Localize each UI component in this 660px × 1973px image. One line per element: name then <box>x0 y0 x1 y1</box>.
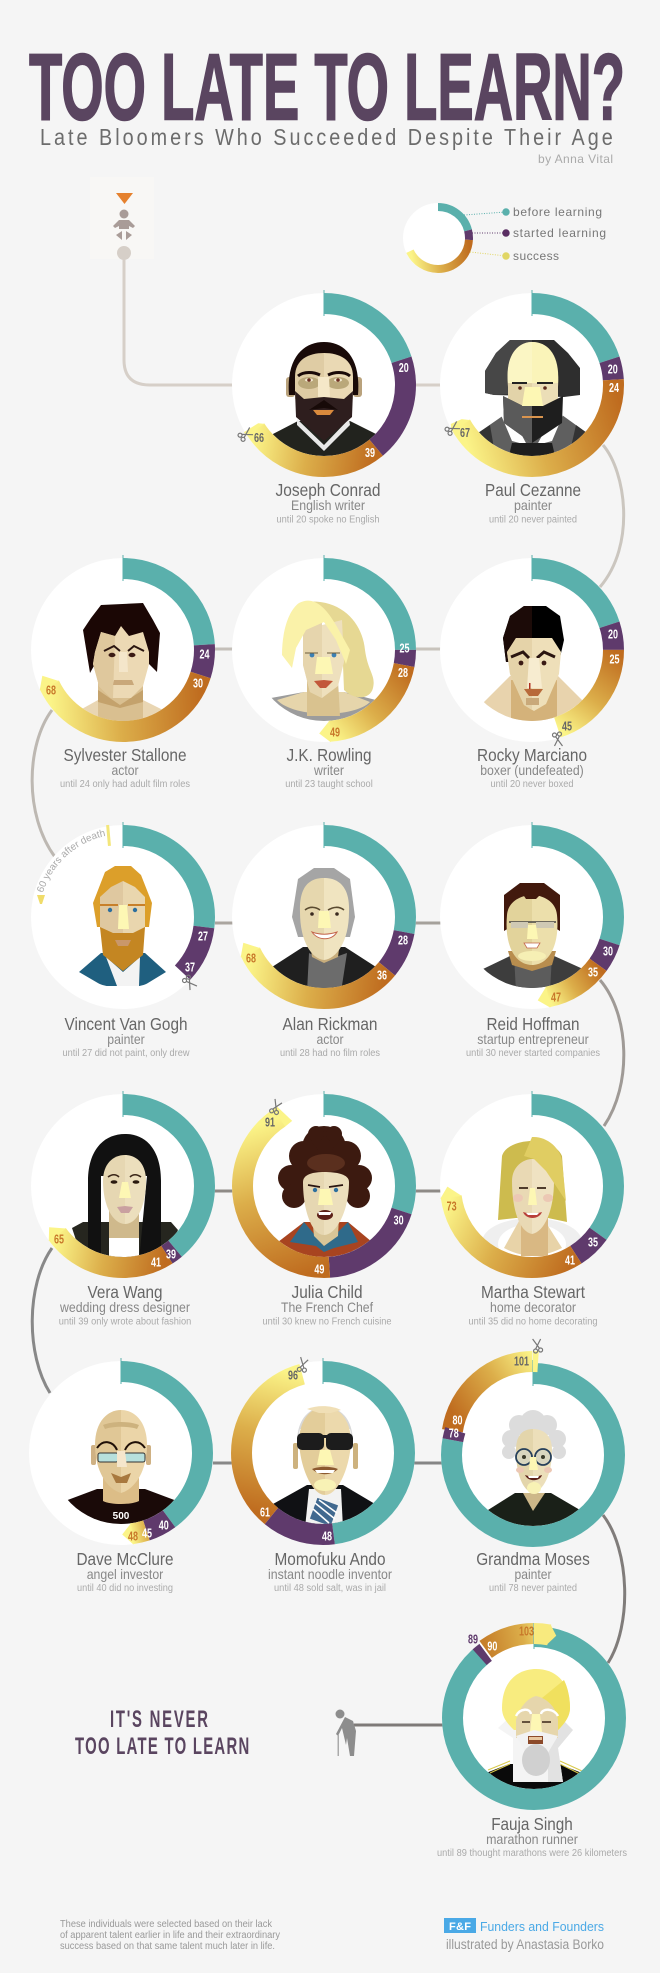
ring values <box>185 930 208 974</box>
ring values: 41 <box>151 1256 161 1270</box>
label: Fauja Singh: until 89 thought marathons were 26 kilometers <box>437 1848 627 1859</box>
ring values: 68 <box>246 952 256 966</box>
label: Vera Wang: wedding dress designer <box>59 1299 190 1315</box>
label: Sylvester Stallone: Sylvester Stallone <box>64 745 186 765</box>
label: Momofuku Ando <box>268 1549 392 1594</box>
portrait: Fauja Singh <box>486 1669 582 1793</box>
label: Julia Child: Julia Child <box>292 1282 362 1302</box>
label: Fauja Singh: marathon runner <box>486 1831 578 1847</box>
ring values: 41 <box>565 1254 575 1268</box>
ring values: 47 <box>551 990 561 1004</box>
label: Vera Wang <box>59 1282 191 1328</box>
label: Joseph Conrad: English writer <box>291 497 365 513</box>
label: Joseph Conrad <box>276 480 380 526</box>
ring values: 35 <box>588 1236 598 1250</box>
label: Reid Hoffman <box>466 1014 600 1059</box>
portrait: J.K. Rowling <box>271 601 376 725</box>
ring chart: Reid Hoffman <box>450 822 614 1010</box>
label: Martha Stewart: home decorator <box>490 1299 576 1315</box>
portrait: Joseph Conrad <box>271 342 376 460</box>
person: Fauja Singh <box>437 1623 627 1859</box>
portrait: Rocky Marciano <box>483 606 585 725</box>
ring chart: J.K. Rowling <box>242 555 406 743</box>
ring chart: Joseph Conrad <box>242 290 406 466</box>
label: Sylvester Stallone: until 24 only had adult film roles <box>60 779 190 790</box>
ring values <box>265 1116 404 1276</box>
closing headline: TOO LATE TO LEARN <box>75 1734 249 1760</box>
ring values <box>254 361 409 460</box>
logo: Funders and Founders: F&F <box>449 1921 471 1933</box>
ring chart: Rocky Marciano <box>450 555 614 732</box>
label: Reid Hoffman: until 30 never started companies <box>466 1048 600 1059</box>
logo: Funders and Founders <box>444 1918 604 1934</box>
ring values: 67 <box>460 426 470 440</box>
ring values: 37 <box>185 960 195 974</box>
label: Vincent Van Gogh: until 27 did not paint, only drew <box>62 1048 190 1059</box>
icon: scissors <box>296 1357 310 1374</box>
legend: started learning <box>513 226 606 240</box>
portrait: Sylvester Stallone <box>83 603 162 721</box>
label: Rocky Marciano: until 20 never boxed <box>490 779 574 790</box>
ring values: 49 <box>314 1262 324 1276</box>
ring values: 25 <box>400 642 410 656</box>
portrait: Momofuku Ando <box>273 1406 375 1528</box>
ring values <box>562 628 620 734</box>
icon: scissors <box>237 427 254 442</box>
footer note: of apparent talent earlier in life and their extraordinary <box>60 1930 280 1941</box>
label: Fauja Singh: Fauja Singh <box>491 1814 573 1834</box>
label: Dave McClure: until 40 did no investing <box>77 1583 173 1594</box>
label: Sylvester Stallone: actor <box>112 762 139 778</box>
ring chart: Momofuku Ando <box>242 1358 404 1534</box>
subtitle: Late Bloomers Who Succeeded Despite Their Age <box>40 125 613 150</box>
ring values: 48 <box>322 1530 332 1544</box>
ring chart: Fauja Singh <box>452 1623 616 1800</box>
person: Momofuku Ando <box>231 1357 415 1594</box>
label: Momofuku Ando: Momofuku Ando <box>274 1549 386 1569</box>
ring chart: Grandma Moses <box>452 1360 614 1536</box>
credit: illustrated by Anastasia Borko <box>446 1937 604 1952</box>
legend <box>403 203 606 273</box>
ring values: 27 <box>198 930 208 944</box>
ring values: 35 <box>588 966 598 980</box>
label: Reid Hoffman: Reid Hoffman <box>486 1014 580 1034</box>
ring values <box>128 1518 169 1544</box>
portrait: Alan Rickman <box>272 868 376 992</box>
portrait: Grandma Moses <box>488 1410 580 1530</box>
closing headline <box>75 1707 249 1760</box>
portrait: Reid Hoffman <box>483 883 583 992</box>
portrait: Dave McClure: 500 <box>113 1511 130 1522</box>
label: Martha Stewart <box>468 1282 598 1328</box>
ring values: 45 <box>142 1526 152 1540</box>
icon: scissors <box>268 1099 284 1116</box>
closing headline: IT'S NEVER <box>110 1707 208 1733</box>
ring values: 49 <box>330 726 340 740</box>
ring values: 48 <box>128 1530 138 1544</box>
label: Grandma Moses <box>476 1549 590 1594</box>
label: Grandma Moses: Grandma Moses <box>476 1549 590 1569</box>
ring values: 80 <box>452 1414 463 1428</box>
ring values: 61 <box>260 1506 270 1520</box>
label: Grandma Moses: painter <box>514 1566 552 1582</box>
ring chart: Sylvester Stallone <box>35 555 204 732</box>
ring values: 73 <box>447 1200 457 1214</box>
label: Vincent Van Gogh: Vincent Van Gogh <box>64 1014 188 1034</box>
ring values: 28 <box>398 666 408 680</box>
ring values: 30 <box>603 944 613 958</box>
person: Rocky Marciano <box>440 555 624 790</box>
ring values <box>447 1200 598 1268</box>
ring values: 20 <box>608 628 618 642</box>
person: Dave McClure <box>29 1358 213 1594</box>
person: Martha Stewart <box>439 1091 624 1328</box>
ring values: 20 <box>399 361 409 375</box>
ring chart: Paul Cezanne <box>449 290 614 466</box>
logo: Funders and Founders: Funders and Founders <box>480 1919 604 1934</box>
portrait: Julia Child <box>278 1126 372 1261</box>
label: Joseph Conrad: Joseph Conrad <box>276 480 380 500</box>
ring chart: Vera Wang <box>42 1091 204 1268</box>
ring values: 103 <box>519 1624 534 1638</box>
ring values <box>551 944 613 1004</box>
ring values: 96 <box>288 1368 298 1382</box>
label: Vincent Van Gogh <box>62 1014 190 1059</box>
label: Alan Rickman: actor <box>316 1031 344 1047</box>
label: Dave McClure <box>76 1549 174 1594</box>
footer note <box>60 1919 280 1952</box>
ring values: 89 <box>468 1632 478 1646</box>
ring values <box>246 934 408 982</box>
label: Paul Cezanne: painter <box>514 497 552 513</box>
label: Julia Child <box>262 1282 392 1328</box>
label: Reid Hoffman: startup entrepreneur <box>477 1031 589 1047</box>
ring values <box>460 362 619 440</box>
ring chart: Julia Child <box>242 1091 406 1268</box>
label: Rocky Marciano: Rocky Marciano <box>477 745 587 765</box>
label: Rocky Marciano: boxer (undefeated) <box>480 762 584 778</box>
label: Sylvester Stallone <box>60 745 190 790</box>
person: Grandma Moses <box>441 1339 625 1594</box>
ring values <box>46 648 210 698</box>
portrait: Paul Cezanne <box>478 340 587 460</box>
ring chart: Alan Rickman <box>236 822 406 998</box>
ring values <box>449 1354 529 1440</box>
label: Momofuku Ando: instant noodle inventor <box>268 1566 392 1582</box>
ring values <box>260 1368 332 1544</box>
label: Dave McClure: angel investor <box>87 1566 164 1582</box>
label: J.K. Rowling: J.K. Rowling <box>286 745 372 765</box>
portrait: Martha Stewart <box>482 1137 582 1266</box>
label: Rocky Marciano <box>477 745 587 790</box>
label: J.K. Rowling <box>285 745 373 790</box>
label: J.K. Rowling: writer <box>313 762 344 778</box>
byline: by Anna Vital <box>538 152 613 166</box>
person: Vincent Van Gogh <box>31 822 215 1059</box>
footer note: success based on that same talent much later in life. <box>60 1941 275 1952</box>
label: Paul Cezanne: until 20 never painted <box>489 514 577 526</box>
ring values: 78 <box>449 1426 459 1440</box>
icon: scissors <box>552 732 562 746</box>
ring values: 20 <box>608 362 618 376</box>
person: J.K. Rowling <box>232 555 416 790</box>
label: Dave McClure: Dave McClure <box>76 1549 174 1569</box>
label: Alan Rickman: Alan Rickman <box>282 1014 378 1034</box>
person: Sylvester Stallone <box>31 555 215 790</box>
ring chart: Martha Stewart <box>439 1091 614 1268</box>
ring values: 65 <box>54 1232 64 1246</box>
label: Vera Wang: until 39 only wrote about fashion <box>59 1316 191 1328</box>
person: Alan Rickman <box>232 822 416 1059</box>
person: Joseph Conrad <box>232 290 416 526</box>
ring values: 68 <box>46 684 56 698</box>
ring values: 40 <box>159 1518 169 1532</box>
icon: scissors <box>533 1339 543 1353</box>
label: Alan Rickman: until 28 had no film roles <box>280 1048 380 1059</box>
ring values: 24 <box>609 381 619 395</box>
ring values <box>54 1232 176 1270</box>
portrait: Vincent Van Gogh <box>79 866 166 986</box>
timeline connectors <box>32 258 625 1725</box>
legend: success <box>513 249 559 263</box>
person: Vera Wang <box>31 1091 215 1328</box>
ring chart: Vincent Van Gogh <box>42 822 204 998</box>
label: Vera Wang: Vera Wang <box>88 1282 162 1302</box>
ring values: 28 <box>398 934 408 948</box>
ring chart: Dave McClure <box>40 1358 202 1546</box>
person: Paul Cezanne <box>440 290 624 526</box>
icon: elderly person with cane <box>336 1710 356 1756</box>
label: Paul Cezanne <box>485 480 581 526</box>
posthumous success note: 60 years after death <box>37 830 106 892</box>
ring values: 25 <box>610 652 620 666</box>
label: Momofuku Ando: until 48 sold salt, was in jail <box>274 1583 386 1594</box>
ring values: 91 <box>265 1116 275 1130</box>
icon: baby start marker <box>90 177 154 260</box>
ring values: 30 <box>394 1214 404 1228</box>
icon: scissors <box>444 421 461 436</box>
person: Julia Child <box>232 1091 416 1328</box>
portrait: Dave McClure <box>65 1410 177 1528</box>
label: J.K. Rowling: until 23 taught school <box>285 779 373 790</box>
label: Grandma Moses: until 78 never painted <box>489 1583 577 1594</box>
label: Joseph Conrad: until 20 spoke no English <box>276 514 380 526</box>
label: Vincent Van Gogh: painter <box>107 1031 145 1047</box>
ring values: 24 <box>200 648 210 662</box>
portrait: Vera Wang <box>72 1134 178 1261</box>
ring values: 101 <box>514 1354 529 1368</box>
ring values <box>468 1624 534 1654</box>
ring values: 30 <box>193 676 203 690</box>
ring values: 90 <box>487 1640 497 1654</box>
legend: before learning <box>513 205 602 219</box>
label: Julia Child: until 30 knew no French cuisine <box>262 1316 392 1328</box>
ring values: 39 <box>166 1248 176 1262</box>
label: Julia Child: The French Chef <box>281 1299 373 1315</box>
ring values: 45 <box>562 720 572 734</box>
label: Paul Cezanne: Paul Cezanne <box>485 480 581 500</box>
label: Fauja Singh <box>437 1814 627 1859</box>
label: Alan Rickman <box>280 1014 380 1059</box>
footer note: These individuals were selected based on their lack <box>60 1919 273 1930</box>
ring values: 36 <box>377 968 387 982</box>
label: Martha Stewart: Martha Stewart <box>481 1282 585 1302</box>
label: Martha Stewart: until 35 did no home decorating <box>468 1316 598 1328</box>
ring values: 39 <box>365 446 375 460</box>
ring values: 66 <box>254 431 264 445</box>
ring values <box>330 642 410 740</box>
icon: scissors <box>181 974 197 991</box>
person: Reid Hoffman <box>440 822 624 1059</box>
